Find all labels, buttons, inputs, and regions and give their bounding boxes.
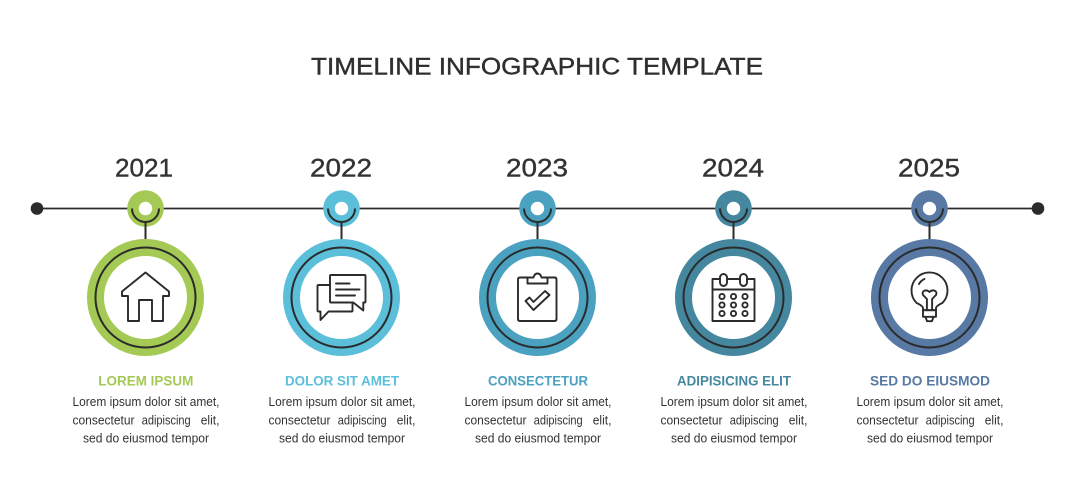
node and ring 2023 — [488, 190, 588, 348]
body 2021: elit, — [201, 413, 220, 427]
title: TIMELINE INFOGRAPHIC TEMPLATE — [311, 54, 763, 80]
body 2024: adipiscing — [730, 413, 779, 427]
body 2024: sed do eiusmod tempor — [671, 431, 798, 445]
body 2024 — [660, 395, 808, 445]
year 2022: 2022 — [310, 154, 372, 182]
body 2025: consectetur — [856, 413, 919, 427]
milestone 2024 — [660, 154, 808, 445]
body 2021: consectetur — [72, 413, 135, 427]
body 2024: elit, — [789, 413, 808, 427]
node and ring 2025 — [880, 190, 980, 348]
body 2023: adipiscing — [534, 413, 583, 427]
body 2025: elit, — [985, 413, 1004, 427]
body 2023 — [464, 395, 612, 445]
year 2023: 2023 — [506, 154, 568, 182]
body 2022: consectetur — [268, 413, 331, 427]
node and ring 2021 — [96, 190, 196, 348]
body 2023: sed do eiusmod tempor — [475, 431, 602, 445]
body 2021: sed do eiusmod tempor — [83, 431, 210, 445]
body 2024: consectetur — [660, 413, 723, 427]
body 2023: Lorem ipsum dolor sit amet, — [464, 395, 612, 409]
body 2023: consectetur — [464, 413, 527, 427]
body 2023: elit, — [593, 413, 612, 427]
body 2022: Lorem ipsum dolor sit amet, — [268, 395, 416, 409]
milestone 2021 — [72, 154, 220, 445]
body 2022: sed do eiusmod tempor — [279, 431, 406, 445]
milestone 2025 — [856, 154, 1004, 445]
year 2024: 2024 — [702, 154, 764, 182]
icon: calendar — [712, 274, 754, 321]
body 2025: sed do eiusmod tempor — [867, 431, 994, 445]
heading 2024: ADIPISICING ELIT — [677, 374, 792, 388]
body 2025: Lorem ipsum dolor sit amet, — [856, 395, 1004, 409]
body 2021 — [72, 395, 220, 445]
heading 2022: DOLOR SIT AMET — [285, 374, 400, 388]
body 2022: adipiscing — [338, 413, 387, 427]
body 2022: elit, — [397, 413, 416, 427]
icon: chat bubbles — [318, 275, 366, 320]
milestone 2023 — [464, 154, 612, 445]
node and ring 2024 — [684, 190, 784, 348]
icon: clipboard — [518, 274, 556, 321]
body 2025 — [856, 395, 1004, 445]
body 2025: adipiscing — [926, 413, 975, 427]
icon: house — [122, 272, 169, 321]
heading 2021: LOREM IPSUM — [98, 374, 193, 388]
body 2021: adipiscing — [142, 413, 191, 427]
year 2025: 2025 — [898, 154, 960, 182]
timeline axis — [31, 202, 1044, 215]
body 2021: Lorem ipsum dolor sit amet, — [72, 395, 220, 409]
year 2021: 2021 — [115, 154, 173, 182]
milestone 2022 — [268, 154, 416, 445]
icon: light bulb — [912, 272, 948, 321]
node and ring 2022 — [292, 190, 392, 348]
heading 2025: SED DO EIUSMOD — [870, 374, 990, 388]
heading 2023: CONSECTETUR — [488, 374, 588, 388]
body 2022 — [268, 395, 416, 445]
body 2024: Lorem ipsum dolor sit amet, — [660, 395, 808, 409]
